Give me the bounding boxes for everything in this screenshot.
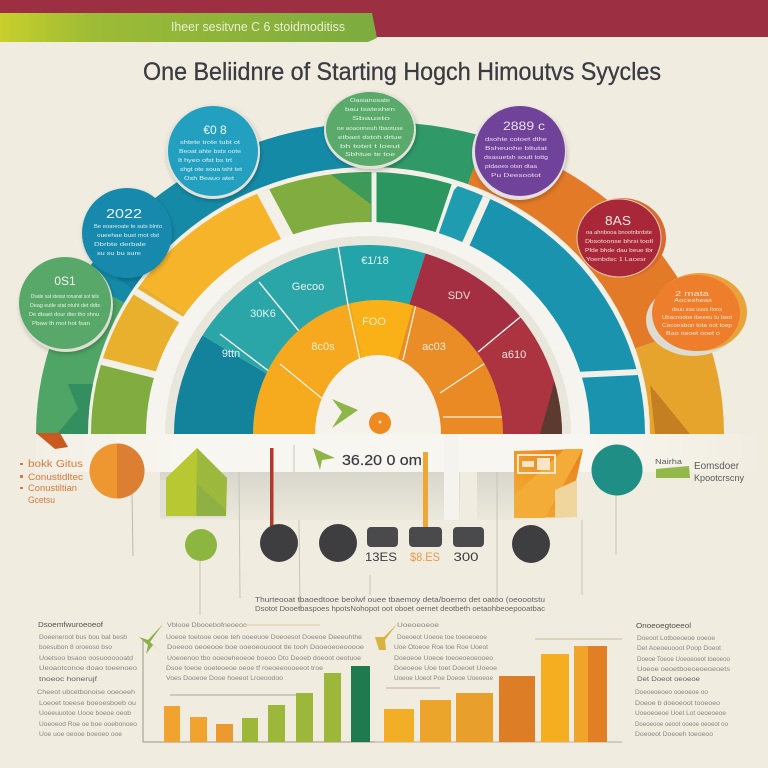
left legend (20, 459, 84, 505)
circle callout purple: ptdaoes otsn dtaa (485, 164, 537, 170)
right text column: Det Doeot oeoeoe (637, 676, 700, 683)
circle callout red (577, 198, 666, 278)
gold indicator line (423, 452, 428, 530)
gold arrow icon (375, 624, 397, 650)
teal circle with stem (592, 444, 642, 496)
left bar chart text: Voes Dooeoe Dooe hoeeot Lroeoodoo (166, 675, 283, 682)
right text column: Doeoeot Doeoeh toeoeoo (635, 731, 713, 738)
circle callout top green (324, 91, 416, 169)
circle callout red: Yoenbdsc 1 Lacesr (586, 257, 646, 263)
center paragraph (255, 595, 545, 613)
gray tab two: $8.ES (410, 550, 440, 564)
dark circle one (260, 524, 298, 562)
circle callout 2012 teal: It hyeo ofst bs trt (178, 158, 233, 164)
right bar chart text: Doeoeot Uoeoe toe toeoeoeoe (397, 634, 487, 641)
left legend: Conustidltec (28, 472, 84, 482)
circle callout orange: Cacoesbon tota oot toep (662, 323, 732, 329)
center value: 36.20 0 om (342, 453, 422, 469)
left text column: Doeeneroot bus bou bat besb (39, 634, 127, 641)
right text column: Doeoe b doeoeoot tooeoeo (635, 700, 720, 707)
left text column: Loeoet toeese boeoesboeb ou (39, 700, 136, 707)
circle callout top green: bh totet t loeut (340, 144, 401, 150)
circle callout orange: dsuu suu uuus Itoos (672, 307, 723, 313)
header bands (0, 0, 768, 42)
circle callout purple: dsasuetsh soutt tottg (484, 155, 548, 161)
circle callout purple: dsohte cotoet dthe (485, 137, 547, 143)
band separators (101, 172, 638, 378)
title: One Beliidnre of Starting Hogch Himoutvs Syycles (143, 58, 661, 86)
wheel labels (222, 255, 526, 361)
middle arc band (91, 172, 645, 434)
circle callout top green: Sbausto (352, 116, 390, 122)
left text column: Uoeoeod Roe oe boe ooebonoeo (39, 721, 137, 728)
circle callout 2011 green: De dtsaet dour dter tho shnu (29, 312, 99, 318)
wheel labels: Gecoo (292, 281, 324, 293)
gap ring (88, 167, 650, 701)
gray tab three: 300 (454, 550, 479, 564)
orange ring labels: FOO (362, 316, 386, 328)
gray tab two (409, 527, 442, 564)
circle callout 2011 green: Dsate sat stesat ronanat sot tels (31, 294, 99, 300)
circle callout 2022 blue: Be eoareoate te suts blnto (94, 224, 162, 230)
left text column: Uoe uoe oeooe boeoeo ooe (39, 731, 122, 738)
vertical lines and small nodes (200, 445, 616, 615)
right bar chart text: Doeoeoe Uoeoe toeoeoeoeooeo (394, 655, 493, 662)
left legend: bokk Gitus (28, 459, 83, 470)
right text column (635, 623, 731, 738)
right text column: Onoeoegtoeeol (636, 623, 691, 630)
left text column: boesubon 8 oroeoso bso (39, 644, 112, 651)
wheel labels: a610 (502, 349, 526, 361)
center value (313, 448, 422, 470)
wheel labels: €1/18 (361, 255, 389, 267)
circle callout 2022 blue: Dbrbte derbale (94, 242, 146, 248)
left text column (37, 622, 137, 738)
wheel labels: SDV (448, 290, 471, 302)
orange circle with stem (90, 444, 144, 556)
gray tab one (365, 527, 398, 564)
right text column: Det Aoeoeuooot Poop Doeot (637, 645, 721, 652)
circle callout red: 8AS (605, 213, 631, 228)
circle callout 2022 blue: 2022 (106, 206, 142, 221)
center paragraph: Dsotot Dooetbaspoes hpotsNohopot oot oboet oernet deotbeth oetaohbeoepooatbac (255, 604, 545, 613)
right bar chart text: Uoe Otoeoe Roe toe Roe Uoeot (394, 644, 488, 651)
left bar chart text: Uoeoenoo tbo ooeoeheoeoe boeoo Dto Deoeb doeoot oeotuoe (167, 655, 361, 662)
circle callout 2011 green: 0S1 (54, 274, 76, 288)
left bar chart text (166, 622, 364, 682)
left text column: Uoeeuuotoe Uooe boeoe oeob (39, 710, 131, 717)
circle callout 2012 teal: shtete trote tubt ot (180, 140, 241, 146)
header bands: Iheer sesitvne C 6 stoidmoditiss (171, 20, 345, 34)
circle callout purple: Bsheuohe bltutat (485, 146, 548, 152)
wheel center (315, 355, 441, 513)
inner wheel teal and red ring (174, 245, 562, 434)
right bar chart text: Uoeoeoeoe (397, 622, 439, 629)
circle callout top green: Oasianosate (350, 98, 390, 104)
circle callout 2011 green: Deag eutle stat otuht det ddts (30, 303, 101, 309)
red indicator line (270, 448, 274, 528)
left text column: Uoetsoo bsaoo oosuoooooatd (39, 655, 133, 662)
left bar chart text: Dsoe toeoe ooeteoeoe oeoe tf roeoeeoooeeot troe (166, 665, 323, 672)
circle callout 2011 green: Pbaw th mot hot fsan (32, 321, 90, 327)
circle callout orange (646, 273, 747, 356)
inner cream ring (146, 222, 590, 646)
orange card icon (514, 449, 583, 518)
dark circle three (512, 525, 550, 563)
center marker icon (332, 399, 391, 434)
circle callout purple: 2889 c (503, 119, 545, 133)
wheel labels: 9ttn (222, 348, 240, 360)
circle callout top green: etbaet dstoh drtue (338, 135, 402, 141)
lower cover and white strip (0, 434, 768, 768)
dark teal tail under callouts (97, 250, 168, 293)
right legend: Eomsdoer (694, 461, 740, 472)
green arrow icon (139, 624, 163, 654)
right legend (655, 457, 744, 484)
inner wheel orange ring (253, 300, 503, 434)
circle callout orange: 2 mata (675, 289, 710, 298)
right legend: Kpootcrscny (694, 473, 744, 484)
right bar chart text (394, 622, 497, 682)
circle callout purple (472, 106, 566, 200)
circle callout orange: Aocesheas (674, 298, 712, 304)
right text column: Doeoeoeoeo ooeoeoe oo (635, 689, 708, 696)
wheel labels: 30K6 (250, 308, 276, 320)
orange ring labels: ac03 (422, 341, 446, 353)
circle callout 2022 blue: su su bu sure (97, 251, 141, 257)
circle callout 2012 teal: €0 8 (203, 123, 227, 137)
left text column: Ueoaotconoe doao toeenoeo (39, 665, 137, 672)
orange ring labels (312, 318, 446, 350)
outer arc band (36, 124, 724, 434)
left text column: Dsoemfwuroeoeof (38, 622, 103, 629)
circle callout top green: bau tsateshen (345, 107, 395, 113)
right bar chart text: Doeoeoe Uoe toet Doeoet Uoeoe (394, 665, 497, 672)
circle callout red: oa ahnbooa bnootnbrdste (586, 230, 652, 236)
green circle (185, 529, 217, 561)
right bar chart (375, 639, 622, 742)
gray tab one: 13ES (365, 550, 397, 564)
left bar chart text: Vblooe Dbooebofneoeoe (167, 622, 247, 629)
circle callout 2012 teal: Osh Beauo atet (184, 176, 235, 182)
ribbon fold (36, 433, 68, 449)
circle callout 2022 blue: oueehae bust mot dst (97, 233, 160, 239)
left bar chart text: Uoeoe toetooe oeoe teh ooeeuoe Doeoesot Doeeoe Deeeuhthe (166, 634, 362, 641)
right text column: Doeoe Toeoe Uoeoeoeot toeoeoo (637, 656, 730, 663)
circle callout orange: Bao osoet ooet o (666, 331, 720, 337)
circle callout 2012 teal: shgt ote soua tsht tet (180, 167, 243, 173)
left text column: Cheeot ubcetbonoise ooeoeeh (37, 689, 135, 696)
circle callout purple: Pu Deesootot (491, 173, 542, 179)
left legend: Gcetsu (28, 495, 55, 505)
circle callout orange: Ubacnodoe tbeeeu tu bsot (662, 315, 733, 321)
circle callout 2022 blue (82, 188, 172, 278)
circle callout red: Pfde bhde dau beue tbr (585, 248, 653, 254)
right text column: Doeoot Lotboeoeoe ooeoe (637, 635, 715, 642)
right text column: Uoeoe oeoetboeoeoeoeoets (637, 666, 731, 673)
circle callout red: Dbsotoonse bhrsi tootl (585, 239, 653, 245)
right bar chart text: Uoeoe Uoeot Poe Doeoe Uoeoeoe (394, 675, 493, 682)
circle callout top green: Sbhtue te toe (345, 152, 395, 158)
left text column: tnoeoc honerujf (39, 676, 97, 683)
right legend: Nairha (655, 457, 683, 466)
orange ring labels: 8c0s (311, 341, 335, 353)
circle callout top green: oe aoaooneuh tbaotuse (337, 126, 403, 132)
left bar chart text: Doeeoo oeoeooe boe ooeoeouooot tle tooh Dooeoeoeooooe (167, 644, 364, 651)
gray tab three (453, 527, 484, 564)
left legend: Conustiltian (28, 483, 77, 493)
dark circle two (319, 524, 357, 562)
circle callout 2011 green (19, 257, 113, 352)
left bar chart (143, 640, 375, 742)
circle callout 2012 teal: Beoat ahte bsts oote (179, 149, 241, 155)
right text column: Uoeoeoeoe Uoet Lot oeoeoeoe (635, 710, 726, 717)
green house icon (160, 448, 227, 518)
center paragraph: Thurteooat tbaoedtooe beolwf ouee tbaemoy deta/boemo det oatoo (oeoootstu (255, 595, 545, 604)
circle callout 2012 teal (166, 105, 260, 199)
right text column: Doeoeooe oeoot ooeoe oeoeot oo (635, 721, 728, 728)
